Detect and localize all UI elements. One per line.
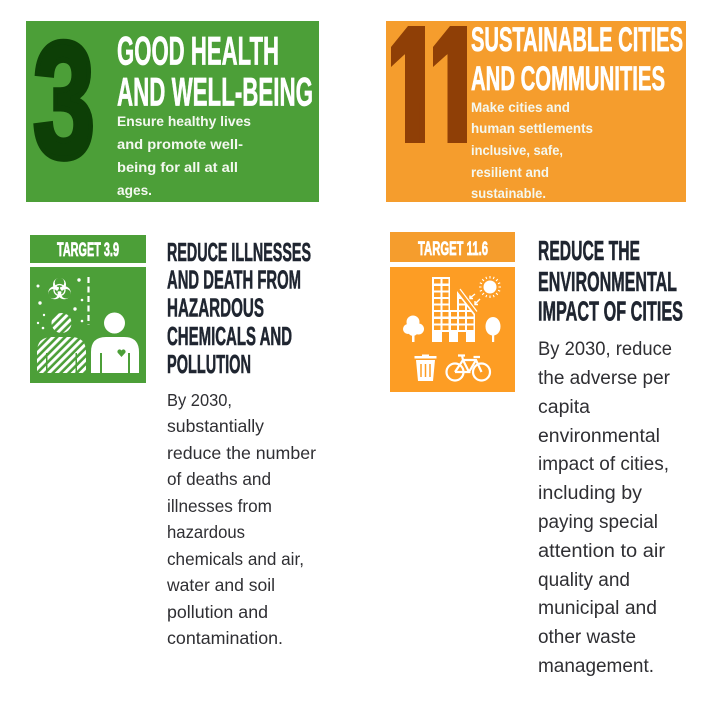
target 11.6 label [390,232,515,262]
icon: target 3.9 pollution and people [30,267,146,383]
target 3.9 description: illnesses from [167,496,272,516]
target 11.6 label: TARGET 11.6 [418,239,488,260]
target 3.9 description: chemicals and air, [167,549,304,569]
goal 11 description [471,99,593,201]
target 3.9 heading: CHEMICALS AND [167,321,292,351]
goal 11 heading [471,21,683,98]
goal 3 description [117,113,251,198]
target 11.6 description: including by [538,483,643,504]
target 3.9 description: pollution and [167,602,268,622]
target 3.9 description: reduce the number [167,443,316,463]
target 11.6 description: impact of cities, [538,454,669,475]
goal number 11: 11 [384,0,474,178]
target 11.6 description: paying special [538,512,658,533]
target 3.9 label: TARGET 3.9 [57,240,119,261]
goal 3 description: ages. [117,182,152,198]
target 3.9 description: water and soil [166,575,275,595]
icon: target 11.6 city, trees, bin and bicycle [390,267,515,392]
target 11.6 description: management. [538,656,654,677]
goal 3 heading [117,30,313,114]
target 11.6 description: attention to air [538,541,666,562]
target 11.6 description: quality and [538,570,630,591]
target 3.9 heading: REDUCE ILLNESSES [167,237,311,267]
target 11.6 description [538,339,672,677]
target 11.6 description: municipal and [538,598,657,619]
goal 3 heading: GOOD HEALTH [117,30,279,74]
target 3.9 description: By 2030, [167,390,232,410]
goal 11 description: resilient and [471,164,549,180]
target 11.6 description: capita [538,397,590,418]
target 3.9 heading: HAZARDOUS [167,292,264,322]
target 3.9 description [166,390,316,648]
target 3.9 description: of deaths and [167,469,271,489]
goal 3 description: and promote well- [117,136,243,152]
panel: goal 11 banner [386,21,686,202]
target 3.9 heading: POLLUTION [167,349,251,379]
target 3.9 heading [167,237,311,379]
goal 3 description: being for all at all [117,159,238,175]
target 11.6 description: By 2030, reduce [538,339,672,360]
goal 11 description: sustainable. [471,185,546,201]
goal 3 heading: AND WELL-BEING [117,70,313,114]
panel: goal 3 banner [26,8,319,202]
goal 11 description: inclusive, safe, [471,142,563,158]
goal 11 description: Make cities and [471,99,570,115]
target 3.9 description: substantially [167,416,264,436]
target 11.6 heading [538,235,683,326]
target 3.9 description: hazardous [167,522,245,542]
goal 11 description: human settlements [471,120,593,136]
target 11.6 description: the adverse per [538,368,671,389]
goal 3 description: Ensure healthy lives [117,113,251,129]
target 3.9 label [30,235,146,263]
target 3.9 heading: AND DEATH FROM [167,264,301,294]
goal number 3: 3 [33,8,95,192]
target 3.9 description: contamination. [167,628,283,648]
target 11.6 description: environmental [538,426,660,447]
target 11.6 description: other waste [538,627,636,648]
